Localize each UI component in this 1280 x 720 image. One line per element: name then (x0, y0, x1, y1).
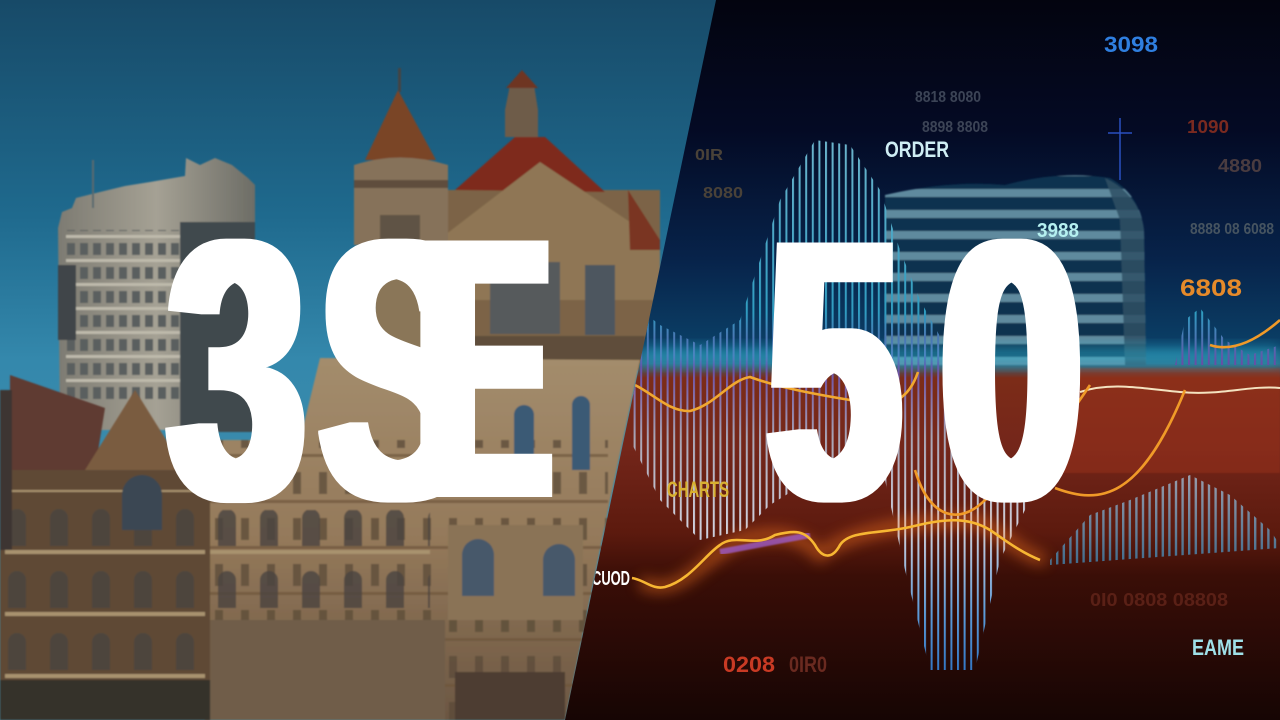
letter E: E (422, 161, 545, 574)
chart labels: EAME (1192, 635, 1244, 660)
title: BSE 50 (169, 161, 1081, 578)
purple streak (720, 535, 810, 552)
digits and letter S: 5 (768, 163, 900, 577)
chart labels: 0208 (723, 652, 775, 677)
sky (0, 0, 730, 720)
waveform bars left (628, 140, 1030, 670)
stock exchange tower (885, 175, 1146, 365)
lower gold chart line (632, 520, 1040, 588)
orange arc line (915, 320, 1280, 515)
chart labels: 8080 (703, 185, 743, 202)
chart labels: 0IR0 (789, 652, 827, 677)
chart labels: 0I0 0808 08808 (1090, 590, 1228, 610)
lower left building (0, 375, 210, 720)
panel: heritage building photo (0, 0, 730, 720)
digits and letter S: 0 (942, 165, 1081, 578)
panel: market data visual (560, 0, 1280, 720)
chart labels: ORDER (885, 137, 949, 162)
chart labels (592, 32, 1274, 677)
lower stone facade (205, 358, 640, 720)
chart labels: 3098 (1104, 32, 1158, 57)
chart labels: 0IR (695, 147, 723, 164)
chart labels: 8818 8080 (915, 89, 981, 106)
dark gradient background (560, 0, 1280, 720)
red-roofed heritage building (354, 68, 660, 370)
chart labels: 4880 (1218, 156, 1262, 176)
right white chart line (1080, 387, 1280, 393)
upper chart line (635, 372, 918, 411)
chart labels: CUOD (592, 568, 630, 590)
red glow band (1040, 368, 1280, 473)
cyan horizon glow (640, 347, 1280, 364)
tall tower building (58, 158, 255, 432)
digits and letter S: S (320, 164, 474, 577)
chart line glow (640, 520, 1045, 587)
chart labels: 3988 (1037, 220, 1079, 242)
chart labels: 8898 8808 (922, 119, 988, 136)
digits and letter S (169, 163, 1081, 578)
waveform bars right (1175, 308, 1280, 365)
sparkle (1108, 118, 1132, 180)
waveform bars lower right (1050, 475, 1280, 565)
chart labels: CHARTS (667, 477, 729, 502)
chart labels: 6808 (1180, 275, 1242, 302)
digits and letter S: 3 (169, 164, 304, 577)
chart labels: 1090 (1187, 117, 1229, 137)
